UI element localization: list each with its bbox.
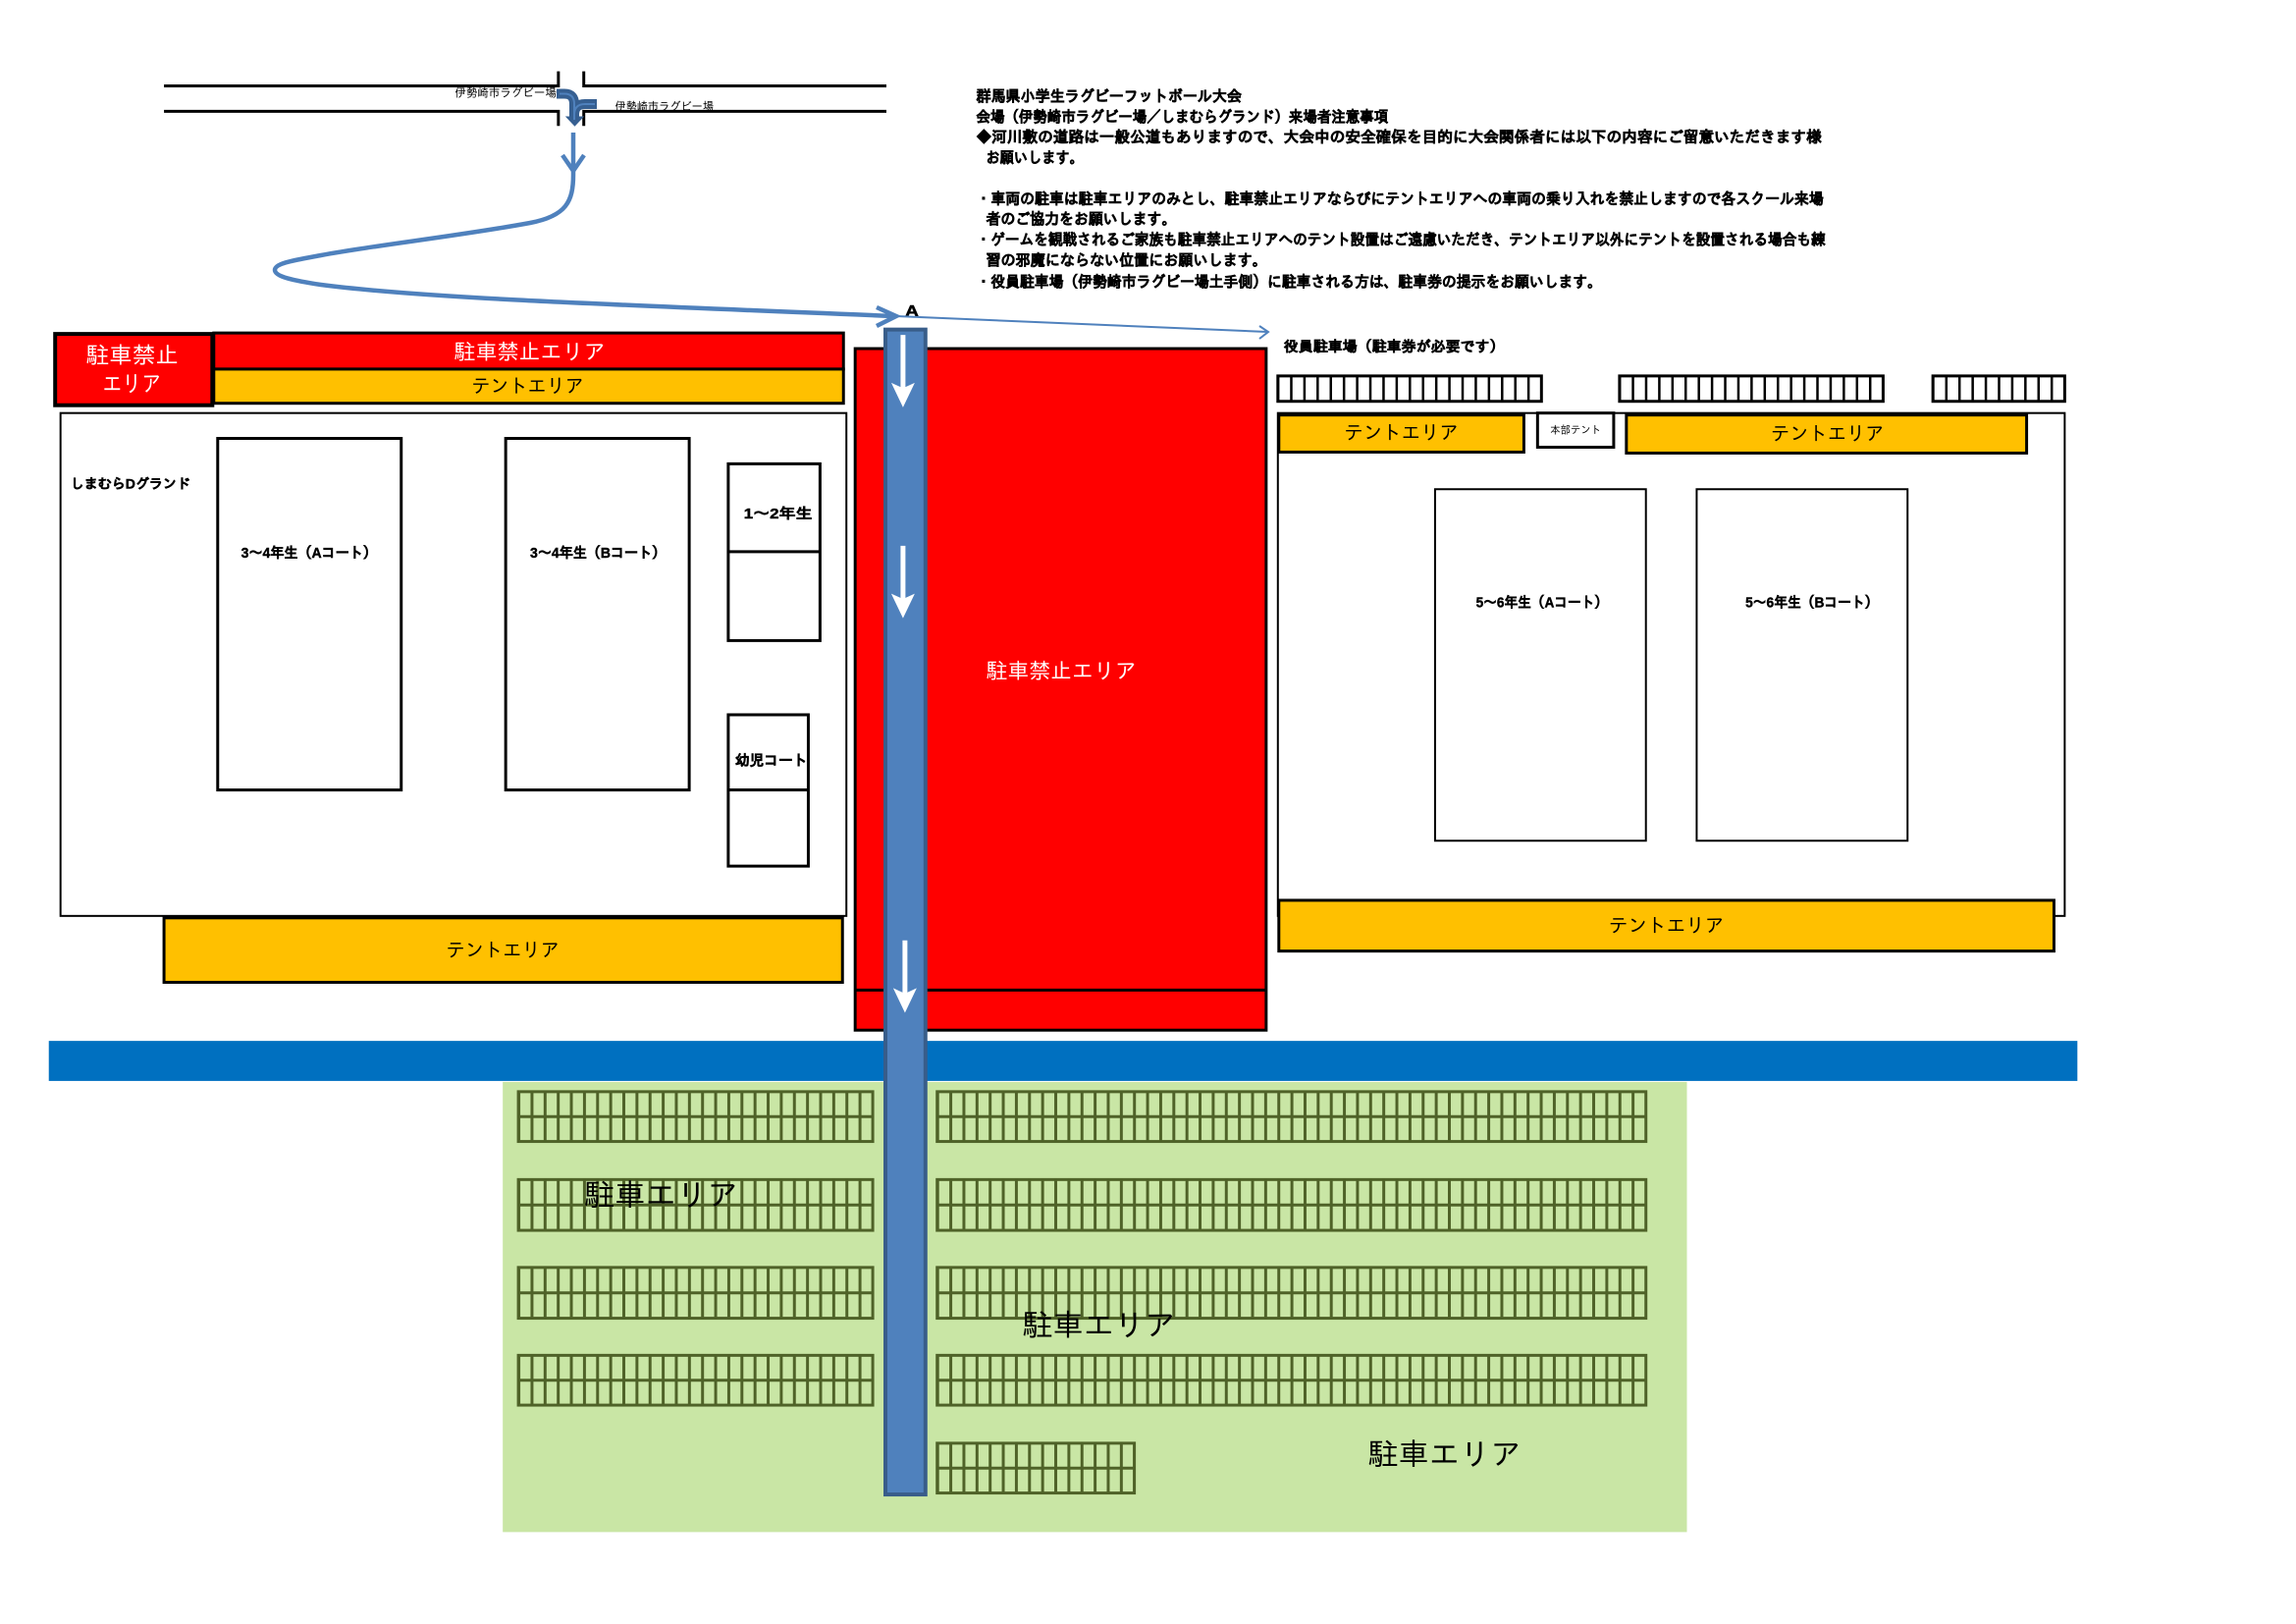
court: grades 3-4 A: [218, 439, 401, 790]
access road: [885, 330, 926, 1494]
notice rule: parking: 者のご協力をお願いします。: [986, 211, 1176, 229]
notice intro: お願いします。: [986, 150, 1084, 167]
tent strip, bottom: [1279, 900, 2054, 951]
notice rule: tents: 習の邪魔にならない位置にお願いします。: [986, 252, 1267, 270]
headquarters tent: 本部テント: [1550, 425, 1601, 437]
tent strip, top left: テントエリア: [1344, 423, 1459, 445]
no-parking box, left corner: 駐車禁止: [86, 343, 179, 368]
label: parking area 3: 駐車エリア: [1367, 1437, 1521, 1472]
court: grades 3-4 B: 3～4年生（Bコート）: [530, 545, 666, 562]
notice subtitle: 会場（伊勢崎市ラグビー場／しまむらグランド）来場者注意事項: [976, 108, 1388, 126]
label: parking area 1: 駐車エリア: [584, 1178, 738, 1213]
notice rule: parking: ・車両の駐車は駐車エリアのみとし、駐車禁止エリアならびにテントエリアへの車両の乗り入れを禁止しますので各スクール来場: [977, 190, 1824, 208]
officials parking row 1: [1278, 376, 1541, 402]
court: grades 5-6 B: [1696, 489, 1907, 840]
tent strip, bottom: [164, 918, 842, 982]
tent strip, bottom: テントエリア: [1609, 916, 1724, 938]
tent strip, top left: [1279, 415, 1523, 452]
label: parking area 2: 駐車エリア: [1022, 1308, 1175, 1342]
court: grades 5-6 B: 5～6年生（Bコート）: [1745, 595, 1878, 612]
notice text block: [976, 87, 1826, 291]
venue map: [49, 72, 2077, 1532]
court: grades 3-4 A: 3～4年生（Aコート）: [241, 545, 377, 562]
panel: left ground (Shimamura D ground): [55, 333, 846, 982]
notice rule: parking: [977, 190, 1824, 229]
icon: direction arrow 2: [892, 546, 914, 618]
notice rule: tents: ・ゲームを観戦されるご家族も駐車禁止エリアへのテント設置はご遠慮いただき、テントエリア以外にテントを設置される場合も練: [977, 232, 1826, 249]
parking background: [503, 1082, 1686, 1532]
label: no parking: 駐車禁止エリア: [986, 659, 1137, 683]
notice intro: ◆河川敷の道路は一般公道もありますので、大会中の安全確保を目的に大会関係者には以下の内容にご留意いただきます様: [977, 129, 1822, 146]
notice rule: officials parking: ・役員駐車場（伊勢崎市ラグビー場土手側）に駐車される方は、駐車券の提示をお願いします。: [977, 273, 1602, 291]
court: grades 5-6 A: [1435, 489, 1646, 840]
court: grades 1-2: [728, 463, 820, 640]
label: officials parking: 役員駐車場（駐車券が必要です）: [1284, 339, 1505, 355]
headquarters tent: [1537, 413, 1614, 447]
parking rows, left block: [518, 1092, 873, 1405]
road lines at crossroads: [164, 72, 886, 126]
no-parking strip, top: 駐車禁止エリア: [454, 340, 606, 364]
tent strip, top: テントエリア: [471, 376, 584, 398]
no-parking strip, top: [214, 333, 843, 369]
label: rugby ground west: 伊勢崎市ラグビー場: [454, 85, 557, 99]
icon: direction arrow 3: [894, 941, 916, 1011]
officials parking row 2: [1620, 376, 1883, 402]
ground outline: [61, 413, 846, 916]
tent strip, top: [214, 369, 843, 404]
river band: [49, 1041, 2077, 1081]
panel: right ground: [1278, 339, 2064, 951]
notice rule: tents: [977, 232, 1826, 270]
notice intro: [977, 129, 1822, 167]
ground outline: [1278, 413, 2064, 916]
notice title: 群馬県小学生ラグビーフットボール大会: [977, 87, 1242, 105]
icon: turn arrows at intersection: [557, 94, 597, 126]
court: preschool: 幼児コート: [735, 753, 807, 770]
panel: central no-parking area: [855, 349, 1266, 1030]
court: grades 3-4 B: [506, 439, 689, 790]
officials parking row 3: [1933, 376, 2064, 402]
parking rows, right block: [937, 1092, 1646, 1493]
label: rugby ground east: 伊勢崎市ラグビー場: [615, 99, 714, 113]
no-parking box, left corner: [55, 334, 212, 406]
court: grades 5-6 A: 5～6年生（Aコート）: [1476, 595, 1608, 612]
court: grades 1-2: 1～2年生: [744, 506, 813, 522]
tent strip, top right: [1627, 415, 2027, 453]
tent strip, bottom: テントエリア: [446, 941, 560, 962]
ground name label: しまむらDグランド: [71, 475, 190, 491]
panel: parking area: [503, 1082, 1686, 1532]
tent strip, top right: テントエリア: [1771, 424, 1884, 446]
arrow: route to point A: [275, 133, 896, 326]
label: point A: A: [905, 303, 920, 320]
arrow: route to officials parking: [896, 316, 1268, 339]
court: preschool: [728, 715, 808, 866]
no-parking box, left corner: エリア: [102, 371, 161, 397]
icon: direction arrow 1: [892, 335, 914, 406]
